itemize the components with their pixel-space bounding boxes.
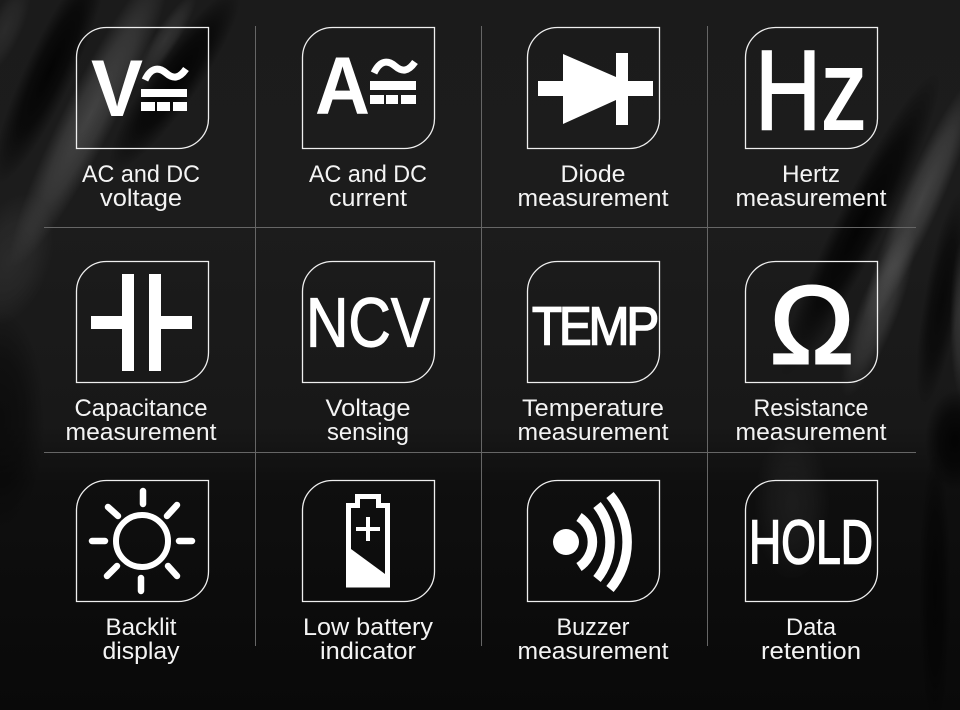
panel: Buzzer measurement: [518, 480, 669, 665]
label: Backlit: [106, 614, 177, 641]
label: Voltage: [326, 395, 410, 422]
label: [326, 395, 410, 446]
grid lines: [44, 26, 916, 646]
icon: sun: [76, 480, 208, 602]
panel: Hertz measurement: [736, 27, 887, 212]
icon: voltage AC/DC: [76, 28, 208, 148]
label: Resistance: [754, 395, 868, 422]
label: Low battery: [303, 614, 433, 641]
icon: current AC/DC: A: [315, 41, 370, 132]
icon: TEMP: [528, 262, 660, 382]
label: measurement: [518, 419, 669, 446]
icon: capacitor: [76, 262, 208, 382]
icon: voltage AC/DC: V: [91, 44, 143, 134]
label: Temperature: [522, 395, 664, 422]
label: measurement: [736, 185, 887, 212]
panel: Diode measurement: [518, 28, 669, 212]
label: Capacitance: [74, 395, 208, 422]
icon: TEMP: TEMP: [532, 296, 657, 356]
label: [518, 395, 669, 446]
label: [736, 395, 887, 446]
icon: battery: [302, 480, 434, 602]
panel: AC and DC current: [302, 28, 434, 212]
label: [518, 161, 669, 212]
panel: Capacitance measurement: [66, 262, 217, 446]
icon: Hz: Hz: [755, 27, 867, 153]
icon: buzzer: [528, 480, 660, 602]
label: measurement: [518, 638, 669, 665]
label: [518, 614, 669, 665]
icon: NCV: NCV: [306, 284, 430, 362]
label: [736, 161, 887, 212]
icon: diode: [528, 28, 660, 148]
label: Data: [786, 614, 837, 641]
icon: omega: Ω: [770, 264, 854, 387]
label: current: [329, 185, 407, 212]
icon: NCV: [302, 262, 434, 382]
label: measurement: [518, 185, 669, 212]
label: voltage: [100, 185, 182, 212]
panel: AC and DC voltage: [76, 28, 208, 212]
label: [303, 614, 433, 665]
label: [82, 161, 200, 212]
label: [66, 395, 217, 446]
label: Hertz: [782, 161, 840, 188]
panel: Backlit display: [76, 480, 208, 665]
label: [761, 614, 861, 665]
label: sensing: [327, 419, 409, 446]
label: [102, 614, 180, 665]
panel: Temperature measurement: [518, 262, 669, 446]
icon: HOLD: HOLD: [749, 508, 873, 578]
label: AC and DC: [309, 161, 427, 188]
icon: HOLD: [746, 480, 878, 602]
label: AC and DC: [82, 161, 200, 188]
label: Diode: [560, 161, 626, 188]
panel: Low battery indicator: [302, 480, 434, 665]
label: display: [102, 638, 180, 665]
label: indicator: [320, 638, 416, 665]
label: measurement: [736, 419, 887, 446]
panel: Resistance measurement: [736, 262, 887, 446]
label: Buzzer: [556, 614, 630, 641]
icon: current AC/DC: [302, 28, 434, 148]
label: measurement: [66, 419, 217, 446]
panel: Data retention: [746, 480, 878, 665]
label: [309, 161, 427, 212]
panel: Voltage sensing: [302, 262, 434, 446]
label: retention: [761, 638, 861, 665]
icon: omega: [746, 262, 878, 387]
